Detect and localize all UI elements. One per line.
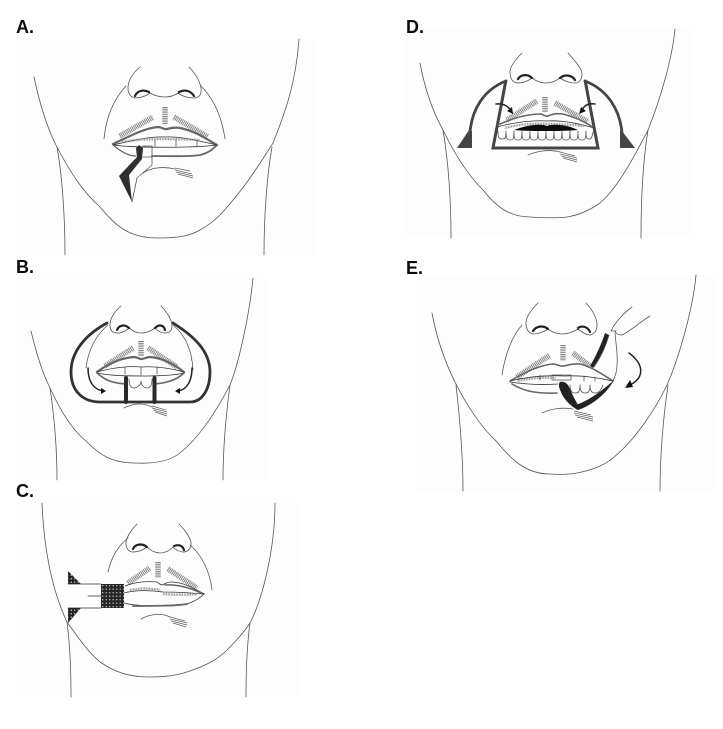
thick incision D xyxy=(457,80,635,148)
flap A xyxy=(119,145,152,202)
chin crease A xyxy=(143,168,193,178)
lips C xyxy=(124,562,204,606)
chin crease B xyxy=(124,404,167,416)
face outline E xyxy=(432,275,696,491)
panel: E xyxy=(406,258,714,491)
arrow: right B xyxy=(175,368,192,394)
chin crease D xyxy=(528,151,577,162)
panel: B xyxy=(16,257,268,480)
face outline D xyxy=(420,29,675,238)
retracted flap E xyxy=(594,307,650,381)
label: E: E. xyxy=(406,258,423,278)
label: A: A. xyxy=(16,17,34,37)
nose C xyxy=(108,524,212,590)
nasolabial lines B xyxy=(86,325,193,370)
lips E xyxy=(510,345,613,393)
flap C xyxy=(68,571,124,623)
arrow: E xyxy=(625,353,641,388)
face outline C xyxy=(42,503,275,697)
arrow: right D xyxy=(579,104,595,114)
panel: D xyxy=(404,17,692,238)
chin crease E xyxy=(542,408,593,421)
panel: A xyxy=(16,17,317,256)
nose E xyxy=(502,303,597,375)
lips B xyxy=(97,341,184,384)
thick incision B xyxy=(71,323,210,402)
chin crease C xyxy=(141,614,187,627)
nose D xyxy=(510,53,582,83)
teeth B xyxy=(129,379,152,388)
lips A xyxy=(113,107,217,157)
nose A xyxy=(104,67,225,139)
arrow: left B xyxy=(88,368,106,394)
face outline A xyxy=(34,39,299,255)
flap bars B xyxy=(126,378,154,402)
flap incision E xyxy=(559,333,614,410)
label: D: D. xyxy=(406,17,424,37)
nose B xyxy=(110,306,172,333)
panel: C xyxy=(15,481,300,697)
label: C: C. xyxy=(16,481,34,501)
arrow: left D xyxy=(496,104,513,114)
teeth D xyxy=(498,131,593,140)
label: B: B. xyxy=(16,257,34,277)
teeth E xyxy=(570,385,603,393)
mouth opening D xyxy=(514,125,578,131)
face outline B xyxy=(31,278,253,480)
lips D xyxy=(497,97,594,128)
